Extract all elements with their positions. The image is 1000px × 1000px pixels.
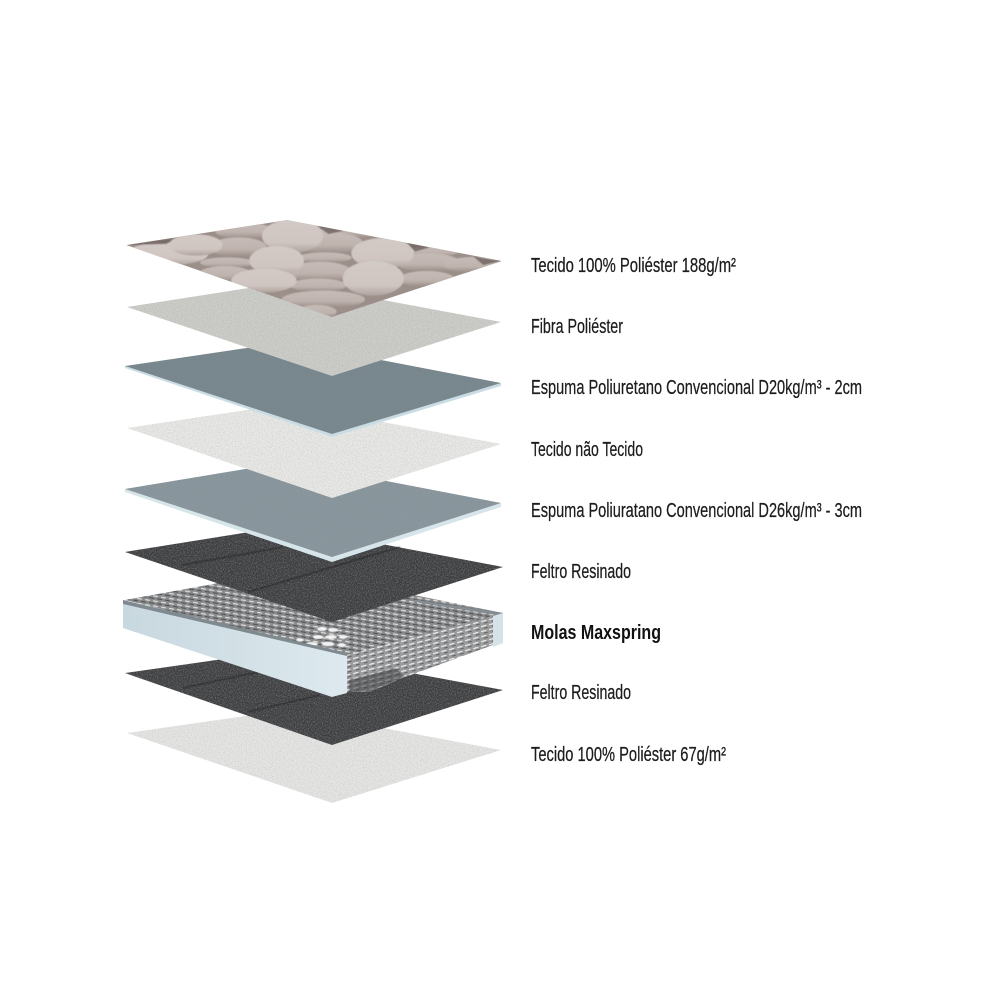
layer: upper resin felt <box>125 526 503 622</box>
layer: foam D26 <box>125 462 501 562</box>
label: foam D26: Espuma Poliuratano Convencional D26kg/m³ - 3cm <box>531 500 862 522</box>
spring side face <box>347 613 503 692</box>
bright coil highlights <box>296 627 347 653</box>
layer: foam D20 <box>125 342 501 437</box>
label: bottom fabric: Tecido 100% Poliéster 67g/m² <box>531 744 726 766</box>
foam rim top edge <box>123 600 347 657</box>
label: top fabric: Tecido 100% Poliéster 188g/m² <box>531 255 736 277</box>
foam rim back right <box>493 613 503 647</box>
label: lower felt: Feltro Resinado <box>531 682 631 704</box>
label: upper felt: Feltro Resinado <box>531 561 631 583</box>
label: polyester fibre: Fibra Poliéster <box>531 316 623 338</box>
layer: polyester fibre <box>127 282 501 376</box>
corner shadows <box>127 225 502 265</box>
label: springs: Molas Maxspring <box>531 622 661 644</box>
layer: bottom polyester fabric <box>127 710 501 803</box>
quilted round pillows <box>125 219 414 296</box>
layer: non-woven fabric <box>127 404 501 498</box>
foam rim front <box>123 604 347 697</box>
layer: quilted top fabric <box>125 219 503 318</box>
spring top face <box>125 570 503 655</box>
layer: lower resin felt <box>125 650 503 745</box>
quilted strips <box>198 222 503 318</box>
label: foam D20: Espuma Poliuretano Convencional D20kg/m³ - 2cm <box>531 377 862 399</box>
layer: Maxspring spring unit <box>123 570 503 697</box>
label: non-woven fabric: Tecido não Tecido <box>531 439 643 461</box>
lower coil shadows <box>349 668 405 692</box>
